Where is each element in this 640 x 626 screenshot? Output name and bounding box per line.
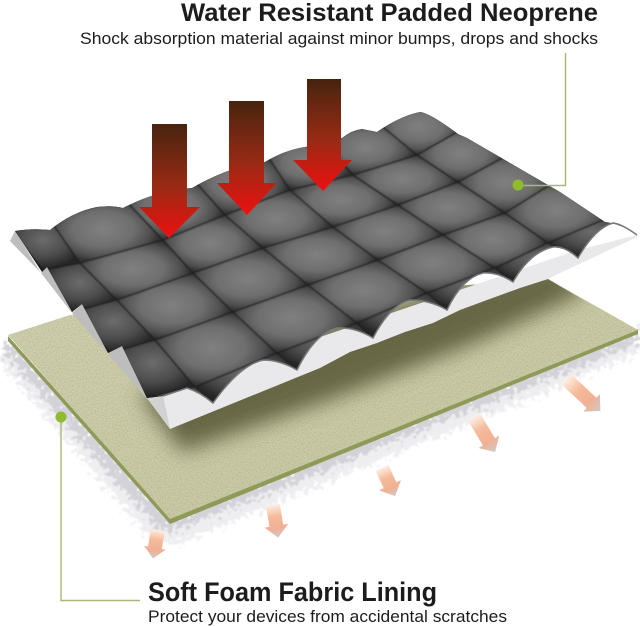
orange arrow 5 (558, 370, 609, 420)
callout: foam leader (56, 412, 140, 600)
foam top surface (8, 279, 638, 519)
shadow on foam (140, 262, 590, 452)
subtitle: Shock absorption material against minor bumps, drops and shocks (80, 29, 598, 48)
foam layer (8, 262, 638, 524)
red arrow 3 (293, 79, 352, 191)
neoprene sheet (0, 100, 640, 429)
orange arrow 4 (464, 411, 505, 458)
neoprene underside (147, 235, 637, 429)
foam description: Protect your devices from accidental scratches (148, 607, 507, 626)
orange arrows (142, 370, 609, 560)
red arrow 1 (139, 124, 200, 238)
neoprene padded surface (15, 112, 624, 402)
red pressure arrows (139, 79, 352, 238)
foam heading: Soft Foam Fabric Lining (148, 577, 437, 607)
orange arrow 2 (261, 503, 290, 539)
orange arrow 3 (371, 463, 406, 501)
red arrow 2 (217, 101, 277, 215)
neoprene left wedges (10, 231, 170, 429)
orange arrow 1 (142, 528, 169, 560)
callout: neoprene leader (512, 53, 566, 190)
neoprene front rim (163, 223, 637, 403)
white fur under foam (0, 330, 640, 544)
foam side edge (8, 329, 638, 524)
